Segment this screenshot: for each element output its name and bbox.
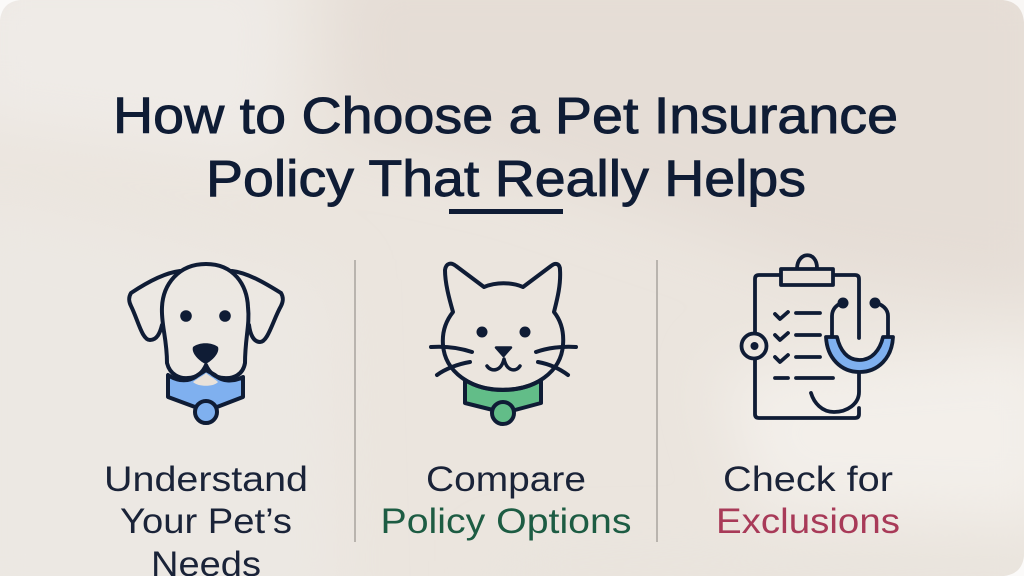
label: compare policy options: Compare [426, 460, 586, 499]
icon: clipboard with stethoscope [742, 255, 893, 418]
title [113, 87, 898, 207]
title: How to Choose a Pet Insurance [113, 87, 898, 144]
divider right [656, 260, 658, 542]
label: compare policy options: Policy Options [380, 502, 632, 541]
label: compare policy options [380, 460, 632, 541]
label: check for exclusions: Exclusions [716, 502, 900, 541]
label: understand your pet's needs: Your Pet’s [120, 502, 292, 541]
icon: dog with blue collar [129, 264, 283, 423]
title underline [449, 209, 563, 214]
label: check for exclusions: Check for [723, 460, 893, 499]
icon: cat with green collar [431, 264, 576, 424]
label: check for exclusions [716, 460, 900, 541]
divider left [354, 260, 356, 542]
label: understand your pet's needs: Understand [104, 460, 308, 499]
title: Policy That Really Helps [206, 150, 806, 207]
label: understand your pet's needs [104, 460, 308, 576]
